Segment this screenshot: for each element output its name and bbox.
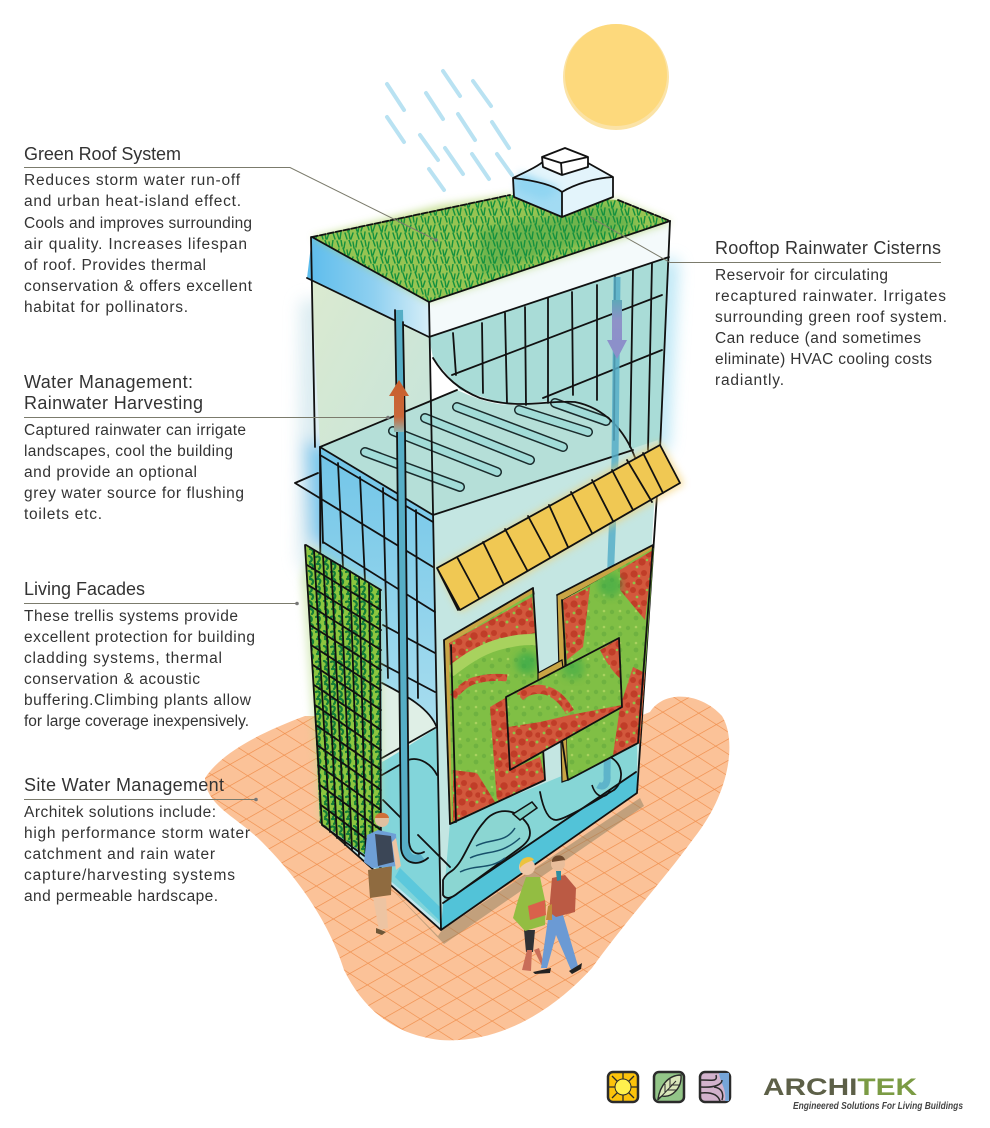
text: site water management: Architek solutions include: xyxy=(24,804,216,821)
purple arrow xyxy=(607,300,627,359)
leader: water management xyxy=(24,416,390,419)
yellow awning xyxy=(437,442,684,612)
right glass upper xyxy=(429,257,669,450)
text: site water management: and permeable hardscape. xyxy=(24,888,218,905)
woman with green coat xyxy=(513,857,546,971)
text: living facades: for large coverage inexpensively. xyxy=(24,713,249,730)
orange arrow xyxy=(389,380,409,432)
text: green roof system: of roof. Provides thermal xyxy=(24,257,206,274)
text: living facades xyxy=(24,608,255,730)
icon: water swirl xyxy=(700,1072,730,1102)
panel left xyxy=(443,587,546,825)
text: rooftop rainwater cisterns: radiantly. xyxy=(715,372,784,389)
text: rooftop rainwater cisterns: eliminate) HVAC cooling costs xyxy=(715,351,932,368)
building xyxy=(295,148,672,930)
leader: green roof system xyxy=(24,168,438,242)
person with backpack xyxy=(364,813,401,935)
watercolor wash behind building xyxy=(298,260,678,600)
floor plate with radiant coils xyxy=(320,358,636,522)
text: living facades: These trellis systems provide xyxy=(24,608,238,625)
pipes xyxy=(399,310,422,859)
panel centre xyxy=(506,638,622,775)
heading: rooftop rainwater cisterns: Rooftop Rainwater Cisterns xyxy=(715,238,941,258)
text: water management: and provide an optional xyxy=(24,464,197,481)
text: rooftop rainwater cisterns: Can reduce (and sometimes xyxy=(715,330,921,347)
sun xyxy=(563,24,669,130)
right wall lower xyxy=(433,440,658,930)
man with red jacket xyxy=(533,855,582,974)
heading: green roof system: Green Roof System xyxy=(24,144,181,164)
text: green roof system: Cools and improves surrounding xyxy=(24,215,252,232)
text: green roof system: habitat for pollinators. xyxy=(24,299,188,316)
window grid right glass xyxy=(452,263,662,450)
heading: water management xyxy=(24,372,203,413)
text: water management xyxy=(24,422,246,523)
text: living facades: excellent protection for building xyxy=(24,629,255,646)
green roof xyxy=(312,195,672,302)
text: rooftop rainwater cisterns xyxy=(715,267,947,389)
trellis with climbing plants xyxy=(301,545,382,868)
basement pond and coils xyxy=(443,757,621,898)
text: living facades: conservation & acoustic xyxy=(24,671,200,688)
water floor right xyxy=(441,745,637,930)
text: green roof system xyxy=(24,172,253,316)
rain xyxy=(387,71,512,190)
text: rooftop rainwater cisterns: Reservoir for circulating xyxy=(715,267,888,284)
text: water management: grey water source for flushing xyxy=(24,485,244,502)
leader: rooftop rainwater cisterns xyxy=(590,217,941,262)
text: green roof system: air quality. Increases lifespan xyxy=(24,236,247,253)
leader: living facades xyxy=(24,602,299,605)
text: site water management xyxy=(24,804,250,905)
left wall upper xyxy=(311,278,433,515)
heading: living facades: Living Facades xyxy=(24,579,145,599)
plaza with paving grid xyxy=(205,697,729,1040)
text: water management: toilets etc. xyxy=(24,506,102,523)
logo: Architek: ARCHI TEK xyxy=(763,1074,918,1101)
text: site water management: catchment and rain water xyxy=(24,846,215,863)
heading: site water management: Site Water Management xyxy=(24,775,224,795)
building outline xyxy=(307,221,670,930)
lower left pale room and water xyxy=(382,683,437,860)
window grid left wall xyxy=(295,447,437,775)
text: living facades: cladding systems, thermal xyxy=(24,650,222,667)
heading: water management: Water Management: xyxy=(24,372,193,392)
roof band left xyxy=(307,237,429,337)
building shadow xyxy=(375,798,644,944)
icon: sun xyxy=(608,1072,638,1102)
text: water management: landscapes, cool the building xyxy=(24,443,233,460)
text: site water management: high performance storm water xyxy=(24,825,250,842)
text: site water management: capture/harvesting systems xyxy=(24,867,235,884)
living wall panels xyxy=(440,540,660,830)
left wall lower xyxy=(319,447,441,930)
text: water management: Captured rainwater can irrigate xyxy=(24,422,246,439)
leader: site water management xyxy=(24,798,258,801)
text: green roof system: conservation & offers excellent xyxy=(24,278,253,295)
heading: water management: Rainwater Harvesting xyxy=(24,393,203,413)
text: green roof system: and urban heat-island effect. xyxy=(24,193,241,210)
rooftop cistern xyxy=(513,148,613,217)
text: green roof system: Reduces storm water run-off xyxy=(24,172,241,189)
text: rooftop rainwater cisterns: recaptured rainwater. Irrigates xyxy=(715,288,946,305)
logo: Architek xyxy=(763,1074,963,1112)
roof band right xyxy=(429,221,670,337)
text: rooftop rainwater cisterns: surrounding green roof system. xyxy=(715,309,947,326)
panel right xyxy=(538,540,660,790)
text: living facades: buffering.Climbing plants allow xyxy=(24,692,252,709)
icon: leaf xyxy=(654,1072,684,1102)
